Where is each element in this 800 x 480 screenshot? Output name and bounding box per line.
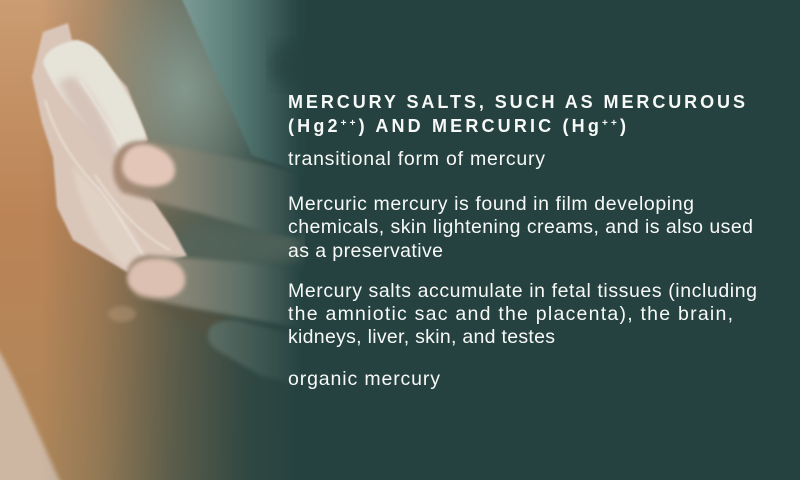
- text: mercuric mercury uses: Mercuric mercury is found in film developing: [288, 193, 694, 215]
- heading: [288, 92, 745, 136]
- text: mercuric mercury uses: chemicals, skin lightening creams, and is also used: [288, 216, 753, 238]
- fingernail: [128, 259, 185, 298]
- heading: MERCURY SALTS, SUCH AS MERCUROUS: [288, 92, 745, 112]
- dim band between fingers: [165, 217, 305, 273]
- pale fabric at lower left: [0, 345, 62, 480]
- gradient overlay: [0, 0, 320, 480]
- heading: ): [620, 116, 626, 136]
- cream ridges: [45, 80, 170, 265]
- photo: cream applied to skin: [0, 0, 320, 480]
- third finger: [208, 320, 300, 386]
- cream smear: [32, 23, 187, 272]
- text: mercury salts accumulation: Mercury salts accumulate in fetal tissues (including: [288, 280, 757, 302]
- fingernail: [122, 144, 175, 186]
- dark fold in fabric: [271, 41, 319, 89]
- text: mercuric mercury uses: as a preservative: [288, 240, 443, 262]
- lower finger: [127, 255, 300, 328]
- heading: ++: [341, 118, 356, 129]
- solid panel: [305, 0, 800, 480]
- text: mercury salts accumulation: the amniotic sac and the placenta), the brain,: [288, 303, 733, 325]
- text: mercuric mercury uses: [288, 193, 753, 262]
- text: transitional form: transitional form of mercury: [288, 148, 545, 170]
- text: mercury salts accumulation: [288, 280, 757, 348]
- heading: (Hg2: [288, 116, 338, 136]
- heading: ++: [602, 118, 617, 129]
- faint mark on skin: [108, 306, 136, 322]
- heading: ) AND MERCURIC (Hg: [359, 116, 599, 136]
- skin background: [0, 0, 320, 480]
- upper finger: [113, 141, 300, 238]
- fabric at upper right: [180, 0, 305, 175]
- text: mercury salts accumulation: kidneys, liver, skin, and testes: [288, 326, 555, 348]
- text: organic mercury: organic mercury: [288, 368, 440, 390]
- finger shadow on skin: [140, 298, 230, 335]
- teal haze at top: [75, 0, 295, 240]
